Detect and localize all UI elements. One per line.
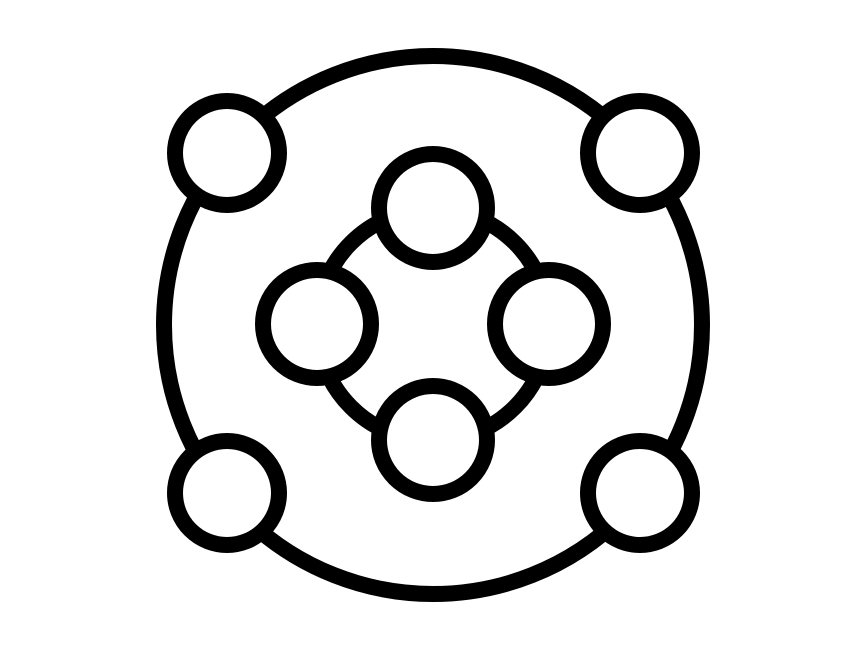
inner node: bottom (379, 386, 487, 494)
inner ring (317, 209, 549, 441)
corner node: bottom-right (588, 441, 692, 545)
corner node: bottom-left (175, 441, 279, 545)
corner node: top-right (588, 101, 692, 205)
corner node: top-left (175, 101, 279, 205)
outer ring (164, 56, 702, 594)
inner node: left (263, 270, 371, 378)
inner node: top (379, 154, 487, 262)
inner node: right (495, 270, 603, 378)
